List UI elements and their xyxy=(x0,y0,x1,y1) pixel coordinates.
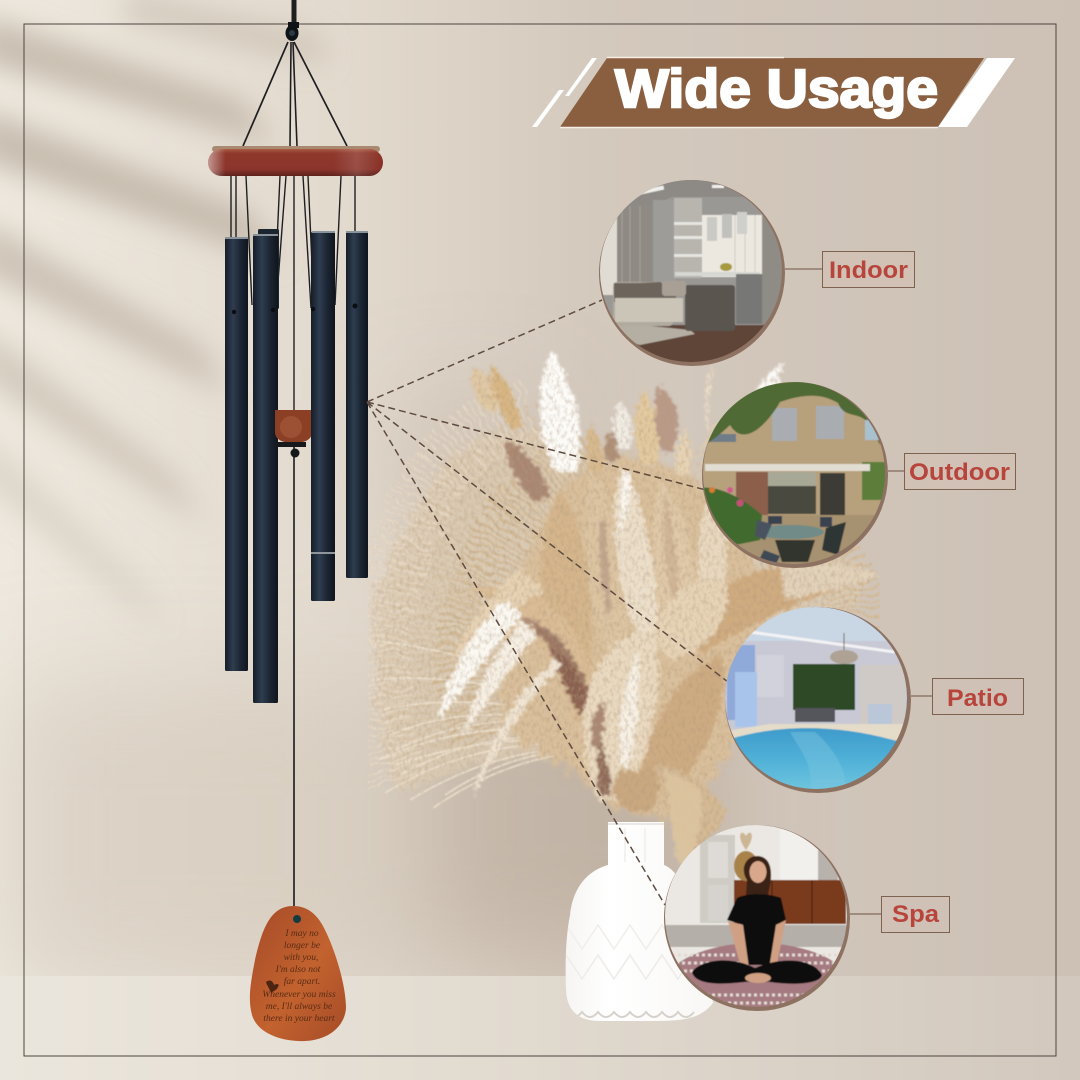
patio label: Patio xyxy=(947,685,1008,712)
indoor photo circle xyxy=(595,175,790,370)
tube 2 back shadow xyxy=(258,229,279,309)
usage: outdoor xyxy=(700,380,1016,570)
striker xyxy=(275,410,312,458)
spa photo circle xyxy=(664,825,850,1011)
solid core mass xyxy=(501,457,764,820)
title banner xyxy=(532,58,1015,128)
center cord xyxy=(293,440,295,906)
engraved text: there in your heart xyxy=(263,1014,335,1024)
wind chime xyxy=(208,0,383,1041)
hanging cords xyxy=(231,0,355,410)
engraved text: with you, xyxy=(284,953,318,963)
patio photo circle xyxy=(720,605,915,795)
title text: Wide Usage xyxy=(615,59,938,119)
tube 4 xyxy=(346,232,368,578)
sunlight shadow bands on wall xyxy=(0,0,325,630)
wind catcher xyxy=(250,906,346,1041)
engraved text: I'm also not xyxy=(275,965,321,975)
top plume tips xyxy=(472,350,782,502)
usage: indoor xyxy=(595,175,914,370)
white vase xyxy=(566,822,713,1021)
pale fan silhouette xyxy=(372,430,875,792)
outdoor label: Outdoor xyxy=(909,459,1010,486)
tube top caps and eyelets xyxy=(225,231,368,314)
plumes over vase neck xyxy=(665,770,703,875)
soft wall shading xyxy=(0,400,720,990)
usage: patio xyxy=(720,605,1024,795)
wooden ring xyxy=(208,146,383,176)
spa label: Spa xyxy=(892,901,940,928)
engraved text: me, I'll always be xyxy=(266,1002,332,1012)
tube 3 xyxy=(311,232,335,601)
connector xyxy=(850,913,881,915)
outdoor label xyxy=(904,454,1016,490)
floor xyxy=(0,976,1080,1080)
left arching plumes xyxy=(438,570,605,800)
engraved text: far apart. xyxy=(284,976,320,987)
banner accents xyxy=(532,58,1015,127)
fibrous pale fans xyxy=(378,410,852,780)
tube 1 xyxy=(225,238,248,671)
engraved text: Whenever you miss xyxy=(262,990,336,1000)
connector xyxy=(888,470,904,472)
engraved text: I may no xyxy=(284,929,319,939)
bead xyxy=(286,22,299,41)
indoor label: Indoor xyxy=(829,257,908,284)
upright front plumes xyxy=(541,468,727,670)
patio label xyxy=(932,678,1024,714)
front cream plume xyxy=(583,632,727,862)
connector xyxy=(911,695,932,697)
lower-left streamers xyxy=(368,640,598,808)
right side bundle xyxy=(640,563,880,792)
tube 2 xyxy=(253,234,278,703)
pampas grass bouquet xyxy=(368,350,880,862)
dashed connector lines xyxy=(367,300,728,905)
usage: spa xyxy=(664,825,950,1011)
spa label xyxy=(882,896,950,932)
connector xyxy=(785,268,822,270)
indoor label xyxy=(822,252,914,288)
engraved text xyxy=(262,929,336,1024)
engraved text: longer be xyxy=(284,941,320,951)
outdoor photo circle xyxy=(700,380,892,570)
